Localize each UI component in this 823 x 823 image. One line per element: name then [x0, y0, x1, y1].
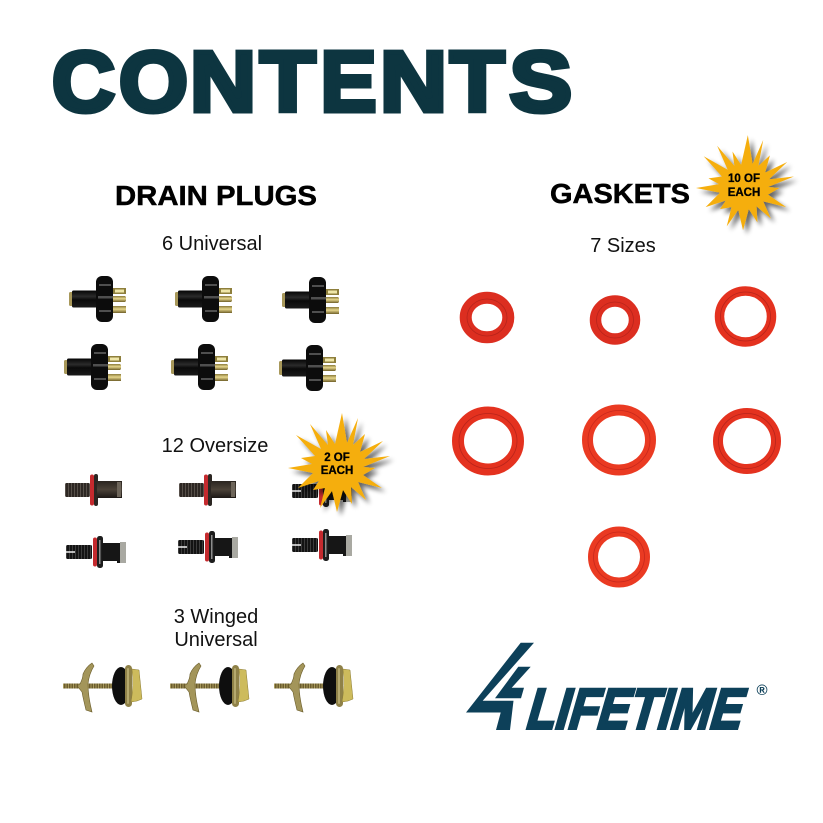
panel: drain plugs — [63, 180, 390, 712]
label: 7 sizes: 7 Sizes — [590, 235, 656, 257]
title: T — [450, 35, 505, 130]
title: N — [190, 35, 256, 130]
label: 6 universal: 6 Universal — [162, 233, 262, 255]
badge: 2 of each: 2 OF — [324, 452, 350, 464]
title: T — [260, 35, 316, 130]
title: S — [510, 35, 572, 130]
gaskets group — [458, 291, 776, 582]
title: N — [380, 35, 447, 130]
badge: 10 of each: EACH — [728, 187, 760, 199]
title: E — [320, 35, 376, 130]
panel: gaskets — [458, 135, 794, 582]
universal plugs group — [64, 276, 339, 391]
title — [52, 35, 572, 130]
label: 3 winged universal: 3 Winged — [174, 606, 258, 628]
logo wordmark: LIFETIME — [520, 678, 754, 741]
logo: 4Lifetime — [466, 643, 768, 741]
badge: 2 of each: EACH — [321, 465, 353, 477]
title: O — [119, 35, 188, 130]
badge: 10 of each — [696, 135, 794, 230]
label: 12 oversize: 12 Oversize — [162, 435, 268, 457]
winged plugs group — [63, 663, 353, 712]
oversize bolts group — [65, 474, 352, 568]
registered mark: ® — [756, 682, 768, 699]
title: C — [52, 35, 115, 130]
label: 3 winged universal: Universal — [174, 629, 258, 651]
logo mark: double 4 — [466, 643, 534, 730]
heading: drain plugs: DRAIN PLUGS — [115, 180, 317, 211]
badge: 2 of each — [288, 413, 390, 512]
heading: gaskets: GASKETS — [550, 178, 690, 209]
badge: 10 of each: 10 OF — [728, 173, 760, 185]
